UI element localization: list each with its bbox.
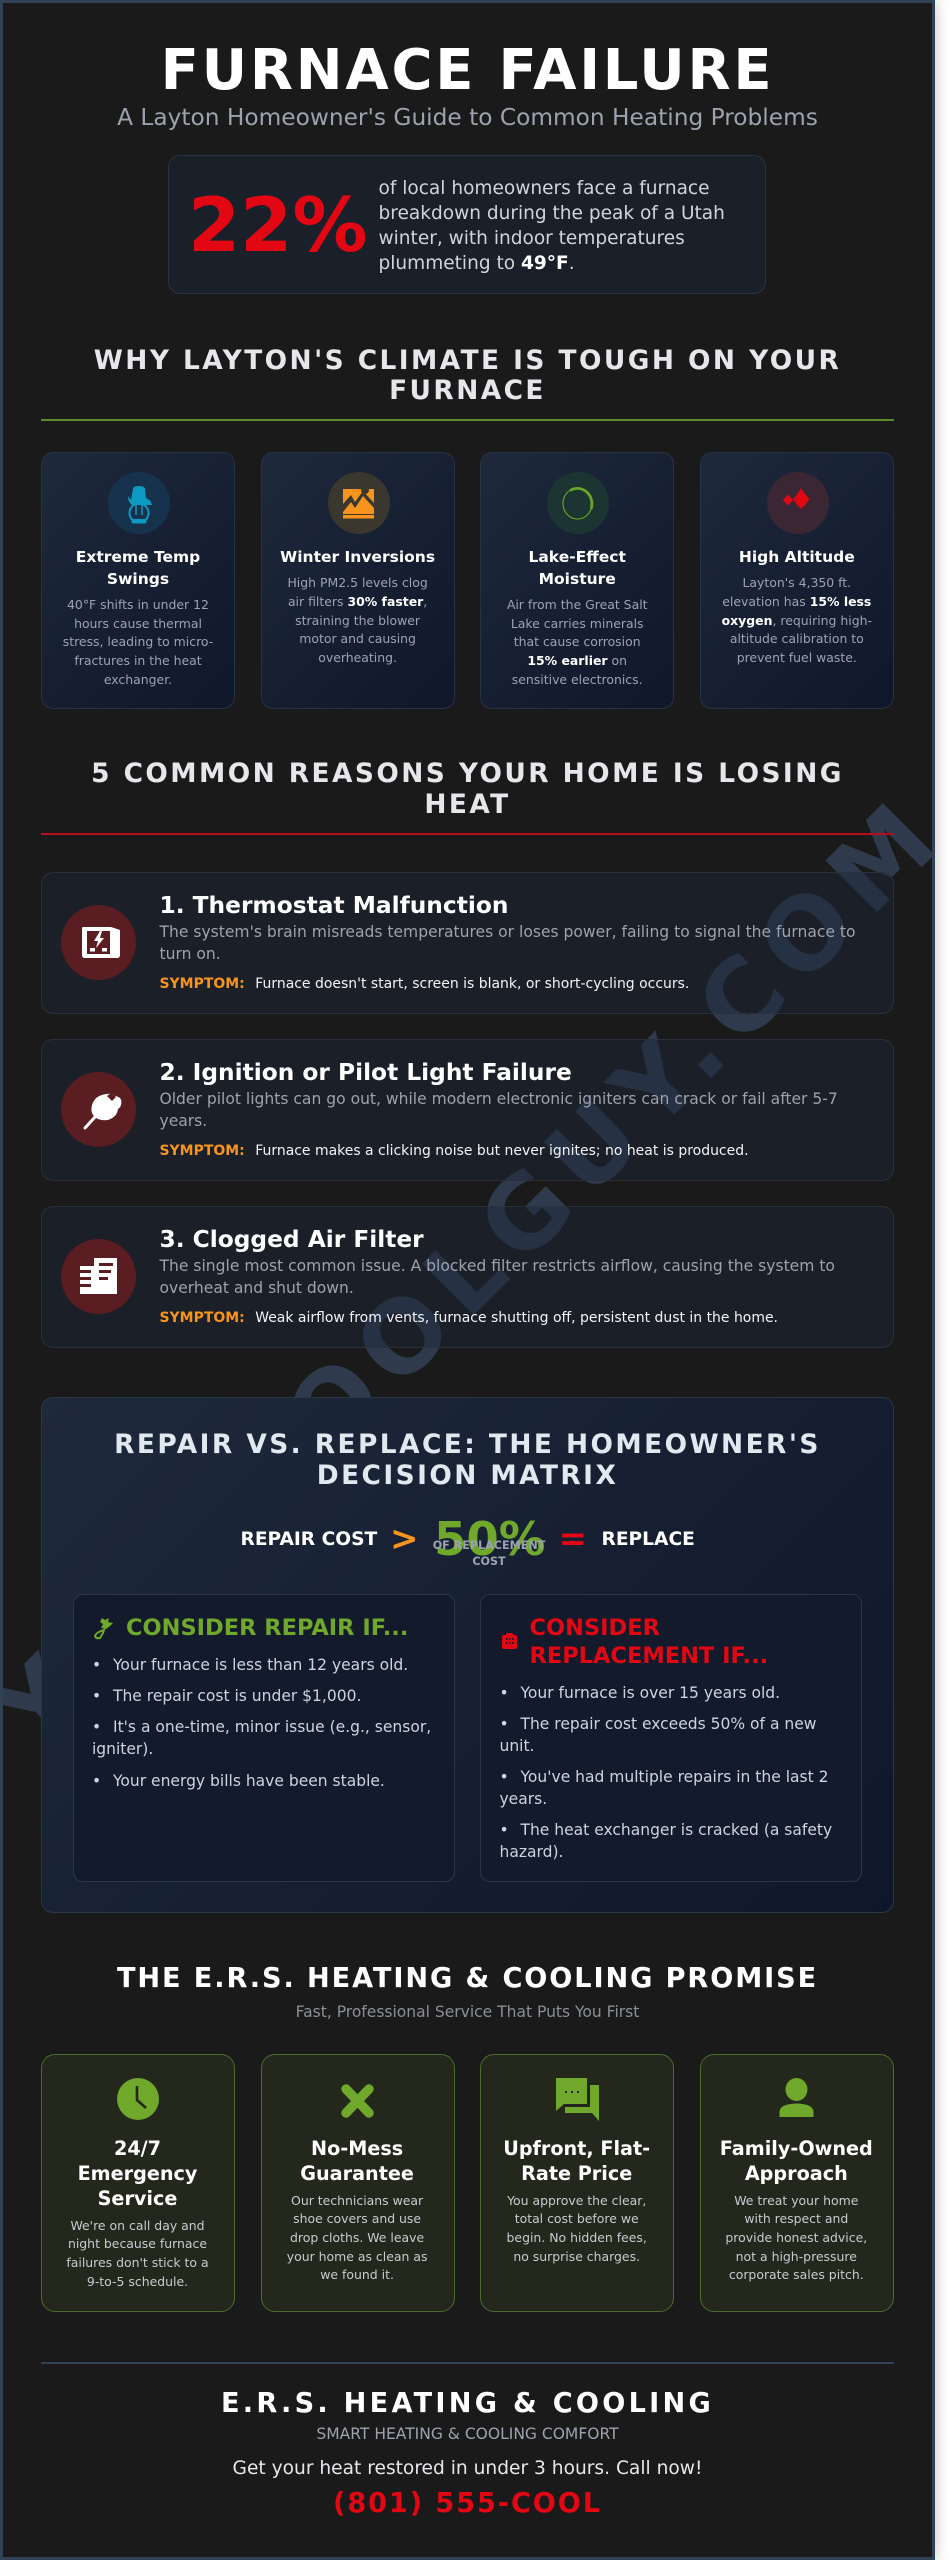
card text: Lake-Effect: [528, 548, 626, 566]
icon: air filter: [60, 1238, 136, 1314]
panel: repair vs replace: [41, 1397, 894, 1913]
sub-panel: consider repair: The repair cost is under $1,000.: [113, 1687, 361, 1705]
card text: sensitive electronics.: [512, 672, 643, 687]
stat description: winter, with indoor temperatures: [378, 228, 685, 249]
heading: reasons: HEAT: [424, 789, 511, 820]
title: 1. Thermostat Malfunction: [160, 892, 508, 919]
title: FURNACE FAILURE: [161, 38, 774, 103]
repair list: •: [92, 1656, 101, 1674]
symptom: SYMPTOM: Furnace makes a clicking noise but never ignites; no heat is produced.: [160, 1143, 749, 1159]
card text: Extreme Temp: [76, 548, 200, 566]
card text: Air from the Great Salt: [507, 597, 648, 612]
heading: climate: FURNACE: [389, 375, 546, 406]
of replacement cost: [433, 1539, 546, 1568]
card: high altitude: [700, 452, 894, 709]
sub-panel: consider replacement: years.: [500, 1790, 547, 1808]
card text: [63, 548, 213, 687]
card text: Layton's 4,350 ft.: [742, 575, 851, 590]
footer divider: [41, 2362, 894, 2364]
card text: failures don't stick to a: [66, 2255, 209, 2270]
card text: air filters 30% faster,: [288, 594, 427, 609]
call to action: Get your heat restored in under 3 hours. Call now!: [233, 2458, 702, 2479]
sub-panel: consider replacement: •: [500, 1768, 509, 1786]
card text: Rate Price: [521, 2162, 632, 2184]
card text: exchanger.: [104, 672, 172, 687]
card text: hours cause thermal: [74, 616, 202, 631]
card text: stress, leading to micro-: [63, 634, 213, 649]
stat description: [378, 178, 725, 274]
card text: High PM2.5 levels clog: [287, 575, 428, 590]
promise card: family-owned: [700, 2054, 894, 2312]
icon: cross: [341, 2084, 374, 2118]
heading: promise: THE E.R.S. HEATING & COOLING PROMISE: [117, 1963, 818, 1994]
subtitle: A Layton Homeowner's Guide to Common Heating Problems: [117, 104, 818, 131]
sub-panel: consider repair: Your energy bills have been stable.: [113, 1772, 385, 1790]
of replacement cost: OF REPLACEMENT: [433, 1539, 545, 1552]
card text: [507, 548, 648, 687]
card text: begin. No hidden fees,: [507, 2230, 647, 2245]
card text: total cost before we: [515, 2211, 639, 2226]
sub-panel: consider repair: [72, 1594, 454, 1882]
icon: moisture ring: [547, 472, 609, 534]
stat callout panel: [168, 155, 766, 294]
card text: no surprise charges.: [513, 2249, 640, 2264]
card text: Emergency: [78, 2162, 197, 2184]
promise card: 24/7: [41, 2054, 235, 2312]
card text: your home as clean as: [287, 2249, 427, 2264]
sub-panel: consider repair: •: [92, 1772, 101, 1790]
card text: 9-to-5 schedule.: [87, 2274, 188, 2289]
replacement heading: REPLACEMENT IF...: [530, 1643, 768, 1669]
card text: You approve the clear,: [507, 2192, 646, 2208]
card text: not a high-pressure: [736, 2249, 857, 2264]
description: [160, 1090, 838, 1130]
card text: motor and causing: [299, 631, 416, 646]
card text: We treat your home: [734, 2192, 858, 2208]
replacement list: Your furnace is over 15 years old.: [520, 1684, 780, 1702]
replacement heading: CONSIDER: [530, 1615, 660, 1641]
card text: shoe covers and use: [293, 2211, 421, 2226]
equals: =: [558, 1519, 587, 1559]
card text: straining the blower: [295, 613, 420, 628]
card text: [287, 2136, 427, 2282]
promise subtitle: Fast, Professional Service That Puts You First: [296, 2003, 639, 2021]
description: Older pilot lights can go out, while modern electronic igniters can crack or fail after 5-7: [160, 1090, 838, 1108]
card text: Approach: [745, 2162, 848, 2184]
card text: We're on call day and: [70, 2218, 205, 2232]
reason 2: [41, 1039, 894, 1181]
sub-panel: consider replacement: •: [500, 1821, 509, 1839]
card text: oxygen, requiring high-: [722, 613, 872, 628]
card text: prevent fuel waste.: [737, 650, 857, 665]
card text: fractures in the heat: [74, 653, 202, 668]
icon: ignition: [60, 1072, 136, 1147]
footer brand: E.R.S. HEATING & COOLING: [221, 2388, 714, 2419]
reason 3: [41, 1206, 894, 1348]
heading: climate: [94, 344, 841, 406]
description: The single most common issue. A blocked filter restricts airflow, causing the system to: [160, 1256, 835, 1274]
icon: mountain image: [328, 472, 390, 534]
card text: corporate sales pitch.: [729, 2267, 864, 2282]
icon: wrench: [94, 1618, 113, 1640]
stat description: breakdown during the peak of a Utah: [378, 203, 725, 224]
heading: repair vs replace: DECISION MATRIX: [317, 1460, 618, 1491]
card text: with respect and: [744, 2211, 848, 2226]
card text: High Altitude: [739, 548, 855, 566]
repair cost: REPAIR COST: [240, 1529, 377, 1550]
card text: we found it.: [320, 2267, 394, 2282]
card text: Guarantee: [300, 2162, 414, 2184]
card text: [722, 548, 872, 665]
description: years.: [160, 1112, 207, 1130]
description: [159, 1256, 835, 1296]
card text: provide honest advice,: [725, 2230, 867, 2245]
promise card: no-mess: [261, 2054, 455, 2312]
card: lake-effect moisture: [480, 452, 674, 709]
sub-panel: consider repair: It's a one-time, minor issue (e.g., sensor,: [113, 1718, 431, 1736]
heading: climate: WHY LAYTON'S CLIMATE IS TOUGH ON YOUR: [94, 344, 841, 376]
card text: drop cloths. We leave: [290, 2230, 424, 2245]
icon: chat bubbles: [556, 2078, 599, 2121]
card text: Winter Inversions: [280, 548, 435, 566]
sub-panel: consider replacement: [480, 1594, 862, 1882]
icon: person: [780, 2078, 814, 2117]
title: 2. Ignition or Pilot Light Failure: [160, 1059, 572, 1086]
sub-panel: consider replacement: unit.: [500, 1737, 534, 1755]
title: 3. Clogged Air Filter: [160, 1226, 424, 1252]
50 percent: 50%: [434, 1512, 545, 1566]
sub-panel: consider replacement: The repair cost exceeds 50% of a new: [520, 1715, 816, 1733]
promise card: upfront price: [480, 2054, 674, 2312]
symptom: SYMPTOM: Weak airflow from vents, furnace shutting off, persistent dust in the home.: [160, 1310, 778, 1326]
card text: overheating.: [318, 650, 397, 665]
stat description: of local homeowners face a furnace: [378, 178, 710, 199]
sub-panel: consider replacement: The heat exchanger is cracked (a safety: [520, 1821, 832, 1839]
replacement heading: [530, 1615, 768, 1669]
icon: thermostat: [60, 905, 136, 980]
reason 1: [41, 872, 894, 1014]
card text: night because furnace: [68, 2236, 207, 2251]
card text: Swings: [107, 570, 169, 588]
heading: repair vs replace: REPAIR VS. REPLACE: THE HOMEOWNER'S: [114, 1429, 821, 1460]
sub-panel: consider replacement: hazard).: [500, 1843, 563, 1861]
card text: 24/7: [114, 2136, 161, 2160]
sub-panel: consider repair: •: [92, 1687, 101, 1705]
icon: calendar: [502, 1633, 517, 1649]
sub-panel: consider replacement: •: [500, 1715, 509, 1733]
replace: REPLACE: [602, 1529, 695, 1550]
card text: 15% earlier on: [527, 653, 627, 668]
description: turn on.: [160, 945, 221, 963]
footer tagline: SMART HEATING & COOLING COMFORT: [316, 2425, 619, 2443]
description: overheat and shut down.: [160, 1278, 354, 1296]
heading: reasons: [91, 758, 844, 820]
sub-panel: consider repair: igniter).: [92, 1740, 153, 1758]
card text: altitude calibration to: [730, 631, 864, 646]
card text: [720, 2136, 873, 2282]
repair list: Your furnace is less than 12 years old.: [113, 1656, 408, 1674]
description: The system's brain misreads temperatures or loses power, failing to signal the furnace to: [160, 923, 856, 941]
sub-panel: consider replacement: You've had multiple repairs in the last 2: [520, 1768, 828, 1786]
greater than: >: [390, 1519, 418, 1559]
card text: Upfront, Flat-: [503, 2136, 650, 2160]
card: winter inversions: [261, 452, 455, 709]
icon: sparkles: [767, 472, 829, 534]
card text: Service: [98, 2186, 177, 2210]
card text: No-Mess: [311, 2136, 403, 2160]
card: extreme temp swings: [41, 452, 235, 709]
repair heading: CONSIDER REPAIR IF...: [126, 1615, 408, 1641]
icon: clock: [117, 2078, 159, 2120]
card text: 40°F shifts in under 12: [67, 597, 209, 612]
card text: Moisture: [539, 570, 616, 588]
description: [159, 923, 856, 963]
card text: [280, 548, 435, 665]
card text: Family-Owned: [720, 2136, 873, 2160]
symptom: SYMPTOM: Furnace doesn't start, screen is blank, or short-cycling occurs.: [160, 976, 689, 992]
card text: Lake carries minerals: [511, 616, 644, 631]
replacement list: •: [500, 1684, 509, 1702]
sub-panel: consider repair: •: [92, 1718, 101, 1736]
stat description: plummeting to 49°F.: [378, 253, 575, 274]
phone number: (801) 555-COOL: [333, 2488, 602, 2519]
card text: that cause corrosion: [514, 634, 641, 649]
card text: elevation has 15% less: [722, 594, 871, 609]
card text: [503, 2136, 650, 2264]
card text: Our technicians wear: [291, 2192, 423, 2208]
heading: reasons: 5 COMMON REASONS YOUR HOME IS LOSING: [91, 758, 844, 789]
formula row: [240, 1512, 695, 1568]
big stat: 22%: [188, 181, 368, 269]
heading: repair vs replace: [114, 1429, 821, 1491]
of replacement cost: COST: [472, 1555, 506, 1568]
icon: temperature: [108, 472, 170, 534]
card text: [66, 2136, 209, 2289]
